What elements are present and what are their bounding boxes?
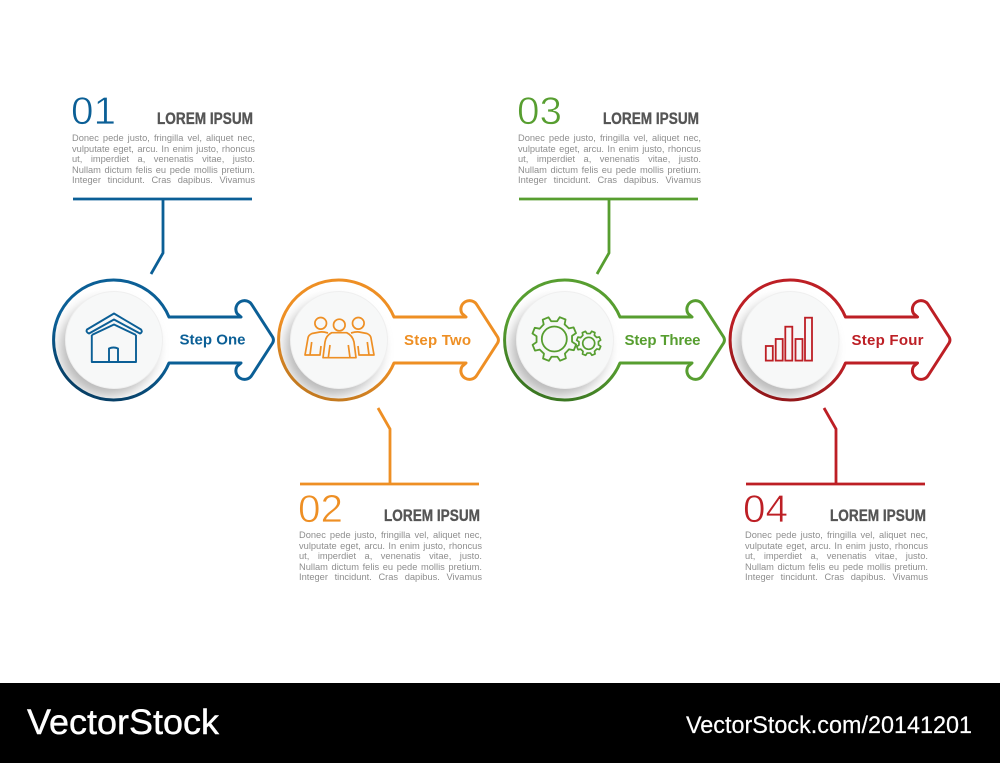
panel: step 02 — [279, 280, 498, 586]
text block 01: Nullam dictum felis eu pede mollis pretium. — [72, 164, 255, 174]
icon: people — [305, 318, 374, 358]
step marker 03 — [505, 280, 724, 400]
label: step one: Step One — [180, 332, 246, 348]
label: step two: Step Two — [404, 332, 471, 349]
raised disc 04 — [742, 292, 839, 388]
step marker 01 — [54, 280, 273, 400]
raised disc 01 — [66, 292, 162, 388]
panel: step 01 — [54, 90, 273, 400]
disc shadow 01 — [60, 300, 156, 396]
text block 03: ut, imperdiet a, venenatis vitae, justo. — [518, 154, 701, 164]
text block 02: Donec pede justo, fringilla vel, aliquet nec, — [299, 530, 482, 540]
label: step three: Step Three — [624, 332, 700, 349]
text block 01: Donec pede justo, fringilla vel, aliquet nec, — [72, 133, 255, 143]
panel: step 03 — [505, 90, 724, 400]
connector line 03 — [519, 199, 698, 274]
number 02: 02 — [298, 488, 343, 531]
label: step four: Step Four — [852, 332, 924, 349]
text block 04: Nullam dictum felis eu pede mollis pretium. — [745, 562, 928, 572]
disc shadow 04 — [736, 300, 832, 396]
connector line 04 — [746, 408, 925, 484]
arrow outline 04 — [730, 280, 950, 400]
icon: gears — [525, 310, 605, 368]
footer band — [0, 683, 1000, 763]
text block 03: vulputate eget, arcu. In enim justo, rhoncus — [518, 144, 701, 154]
text block 01: ut, imperdiet a, venenatis vitae, justo. — [72, 154, 255, 164]
text block 04: vulputate eget, arcu. In enim justo, rhoncus — [745, 540, 928, 550]
arrow outline 02 — [279, 280, 498, 400]
disc shadow 03 — [511, 300, 607, 396]
text block 02 — [299, 530, 482, 586]
text block 01: Integer tincidunt. Cras dapibus. Vivamus — [72, 175, 255, 185]
number 04: 04 — [743, 488, 788, 531]
text block 03: Nullam dictum felis eu pede mollis pretium. — [518, 164, 701, 174]
number 03: 03 — [517, 90, 562, 133]
text block 04: Integer tincidunt. Cras dapibus. Vivamus — [745, 572, 928, 582]
panel: step 04 — [730, 280, 950, 586]
number 01: 01 — [71, 90, 116, 133]
icon: bar chart — [766, 318, 812, 361]
step marker 02 — [279, 280, 498, 400]
text block 04: ut, imperdiet a, venenatis vitae, justo. — [745, 551, 928, 561]
disc shadow 02 — [285, 300, 381, 396]
arrow outline 03 — [505, 280, 724, 400]
arrow outline 01 — [54, 280, 273, 400]
connector line 01 — [73, 199, 252, 274]
text block 01 — [72, 133, 255, 189]
text block 03: Donec pede justo, fringilla vel, aliquet nec, — [518, 133, 701, 143]
text block 01: vulputate eget, arcu. In enim justo, rhoncus — [72, 144, 255, 154]
text block 03: Integer tincidunt. Cras dapibus. Vivamus — [518, 175, 701, 185]
text block 04: Donec pede justo, fringilla vel, aliquet nec, — [745, 530, 928, 540]
heading: lorem ipsum 03: LOREM IPSUM — [603, 109, 699, 128]
watermark url: VectorStock.com/20141201 — [686, 712, 972, 739]
text block 04 — [745, 530, 928, 586]
heading: lorem ipsum 02: LOREM IPSUM — [384, 506, 480, 525]
text block 03 — [518, 133, 701, 189]
text block 02: ut, imperdiet a, venenatis vitae, justo. — [299, 551, 482, 561]
text block 02: Nullam dictum felis eu pede mollis pretium. — [299, 562, 482, 572]
heading: lorem ipsum 04: LOREM IPSUM — [830, 506, 926, 525]
raised disc 03 — [516, 292, 614, 388]
step marker 04 — [730, 280, 950, 400]
connector line 02 — [300, 408, 479, 484]
text block 02: Integer tincidunt. Cras dapibus. Vivamus — [299, 572, 482, 582]
heading: lorem ipsum 01: LOREM IPSUM — [157, 109, 253, 128]
raised disc 02 — [290, 292, 388, 388]
text block 02: vulputate eget, arcu. In enim justo, rhoncus — [299, 540, 482, 550]
icon: house — [87, 314, 142, 362]
watermark logo: VectorStock — [27, 703, 220, 742]
